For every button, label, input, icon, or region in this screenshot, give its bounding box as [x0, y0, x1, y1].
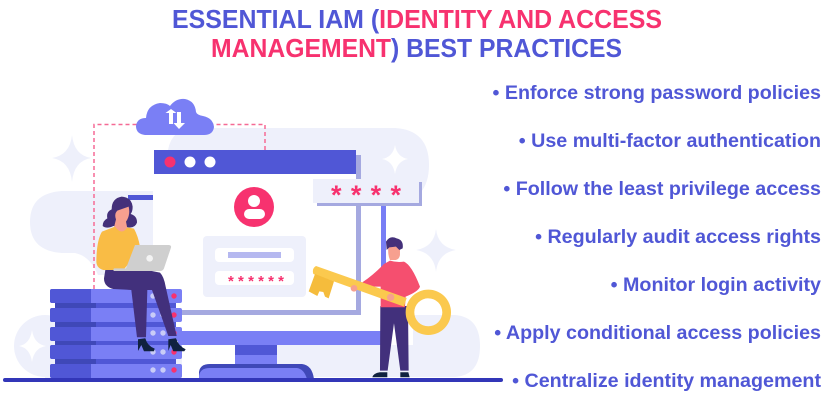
login form: [203, 236, 306, 297]
best practices list: • Centralize identity management: [512, 370, 821, 392]
title: MANAGEMENT) BEST PRACTICES: [211, 35, 622, 63]
key: [309, 266, 451, 335]
pole behind password box: [381, 206, 386, 276]
face and neck: [114, 207, 129, 232]
best practices list: • Monitor login activity: [611, 274, 821, 296]
best practices list: • Enforce strong password policies: [492, 82, 821, 104]
dashed connector lines: [94, 124, 265, 289]
best practices list: • Follow the least privilege access: [503, 178, 821, 200]
login form: ******: [228, 273, 284, 290]
trousers: [380, 306, 409, 371]
pants: [104, 270, 177, 337]
best practices list: • Apply conditional access policies: [494, 322, 821, 344]
small bar behind window: [128, 195, 154, 200]
best practices list: • Regularly audit access rights: [535, 226, 821, 248]
woman with laptop: [96, 197, 186, 351]
password box: [313, 179, 422, 210]
monitor stand: [178, 331, 382, 379]
title: [172, 6, 662, 63]
decorative stars: [19, 135, 456, 362]
shoes: [372, 372, 410, 377]
hands: [351, 285, 357, 292]
server stack: [50, 289, 182, 378]
window title bar: [154, 150, 356, 174]
password box: ****: [331, 180, 401, 210]
laptop: [113, 245, 171, 271]
illustration background blobs: [14, 128, 480, 378]
monitor window: [153, 150, 361, 315]
best practices list: • Use multi-factor authentication: [519, 130, 821, 152]
hair: [386, 237, 403, 250]
sweater: [96, 227, 140, 270]
head: [388, 247, 400, 260]
right shoe: [168, 338, 186, 351]
icon: cloud with transfer arrows: [136, 99, 214, 135]
left shoe: [138, 338, 155, 351]
hair: [103, 197, 137, 228]
best practices list: [492, 82, 821, 392]
man with key: [309, 237, 451, 377]
red sweater: [357, 261, 420, 307]
ground line: [3, 378, 503, 382]
icon: user avatar: [234, 187, 274, 227]
title: ESSENTIAL IAM (IDENTITY AND ACCESS: [172, 6, 662, 34]
